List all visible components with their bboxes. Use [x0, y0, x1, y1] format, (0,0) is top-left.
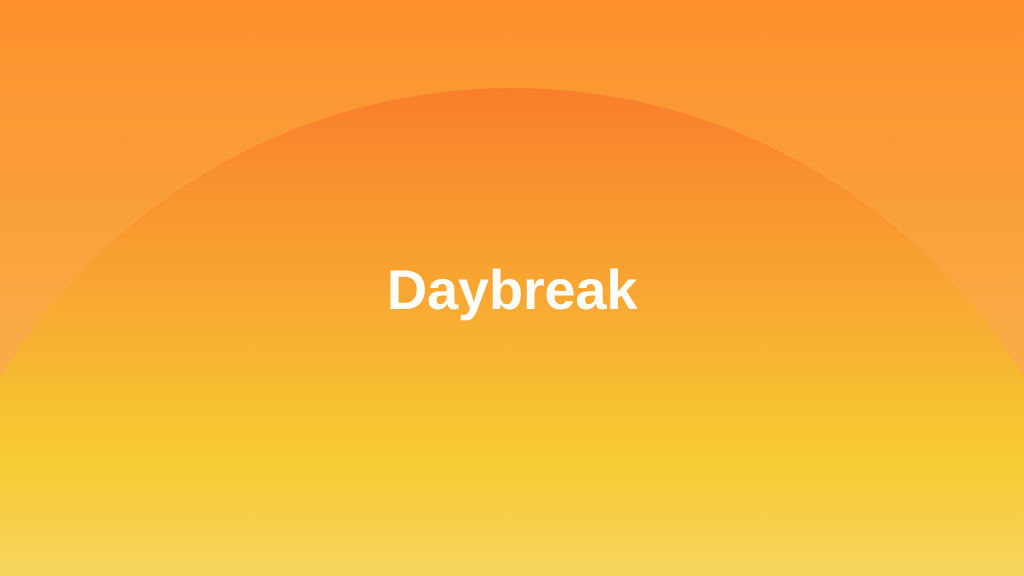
title: Daybreak: [387, 258, 637, 321]
